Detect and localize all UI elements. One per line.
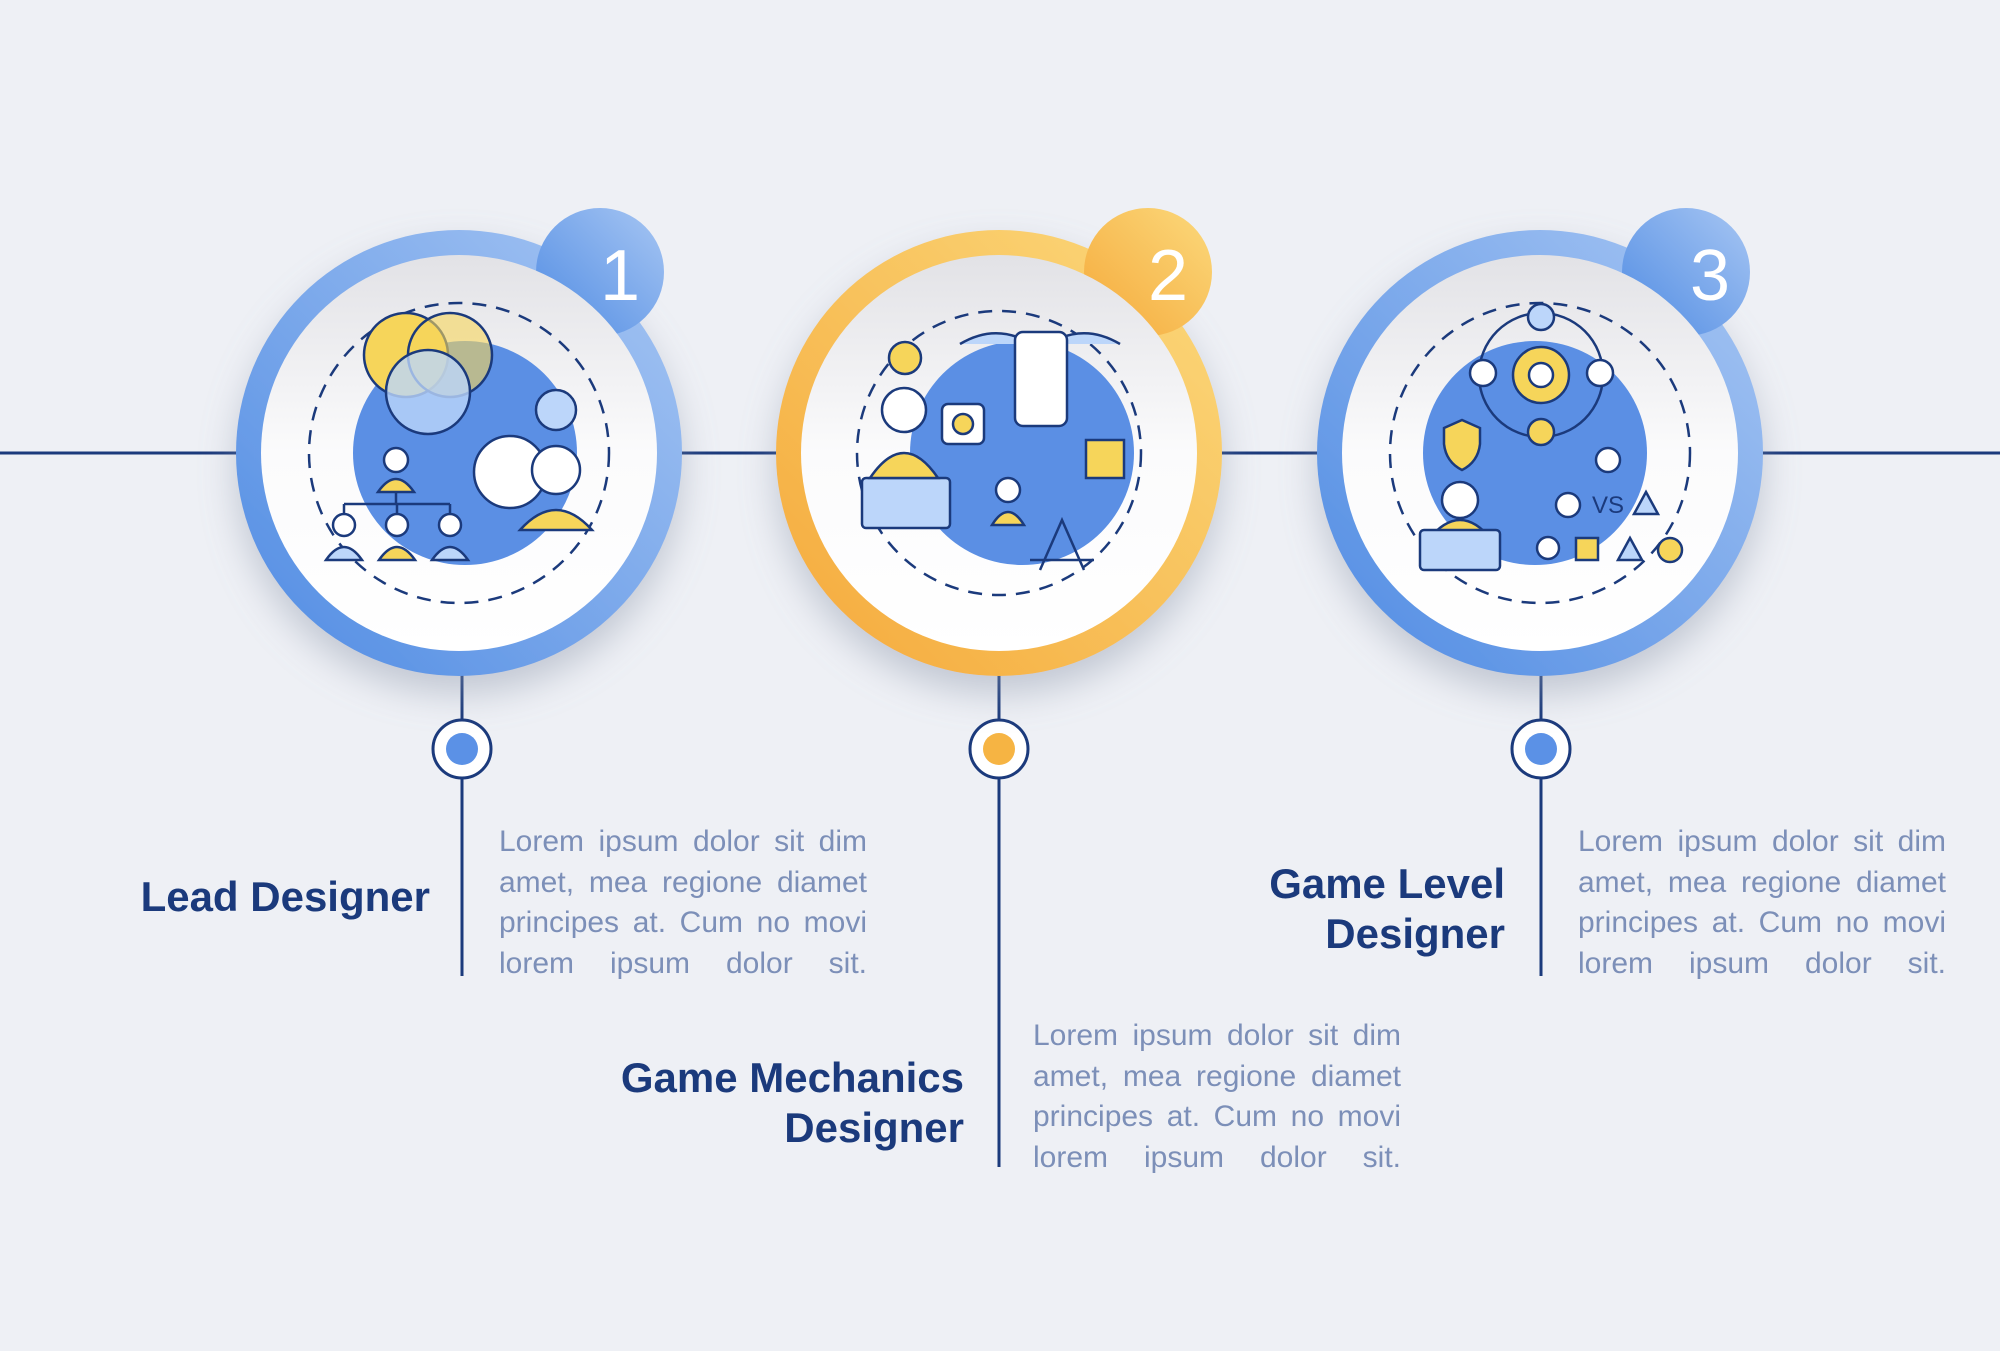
text: level designer description: Lorem ipsum dolor sit dim [1578, 825, 1946, 858]
text: mechanics description: amet, mea regione diamet [1033, 1060, 1401, 1093]
title: Game Level Designer: Game Level [1269, 860, 1505, 907]
title: Game Level Designer [1269, 860, 1505, 957]
circle 2 [776, 208, 1222, 676]
title: Game Level Designer: Designer [1325, 910, 1505, 957]
text: lead designer description: amet, mea regione diamet [499, 866, 867, 899]
text: lead designer description [499, 825, 867, 980]
text: level designer description [1578, 825, 1946, 980]
text: mechanics description: principes at. Cum no movi [1033, 1100, 1401, 1133]
title: Game Mechanics Designer: Game Mechanics [621, 1054, 964, 1101]
text: mechanics description [1033, 1019, 1401, 1174]
markers [433, 720, 1570, 778]
timeline horizontal line [0, 452, 2000, 454]
circle 2: 2 [1148, 236, 1188, 316]
text: level designer description: principes at. Cum no movi [1578, 906, 1946, 939]
title: Game Mechanics Designer: Designer [784, 1104, 964, 1151]
text: mechanics description: Lorem ipsum dolor sit dim [1033, 1019, 1401, 1052]
title: Game Mechanics Designer [621, 1054, 964, 1151]
circle 3: 3 [1690, 236, 1730, 316]
text: lead designer description: lorem ipsum dolor sit. [499, 947, 867, 980]
circle 3: VS [1592, 492, 1624, 519]
title: Lead Designer: Lead Designer [141, 873, 430, 920]
circle 1 [236, 208, 682, 676]
circle 3 [1317, 208, 1763, 676]
vertical connector lines [462, 672, 1541, 1167]
circle 1: 1 [600, 236, 640, 316]
text: lead designer description: principes at. Cum no movi [499, 906, 867, 939]
text: level designer description: lorem ipsum dolor sit. [1578, 947, 1946, 980]
text: level designer description: amet, mea regione diamet [1578, 866, 1946, 899]
text: lead designer description: Lorem ipsum dolor sit dim [499, 825, 867, 858]
text: mechanics description: lorem ipsum dolor sit. [1033, 1141, 1401, 1174]
